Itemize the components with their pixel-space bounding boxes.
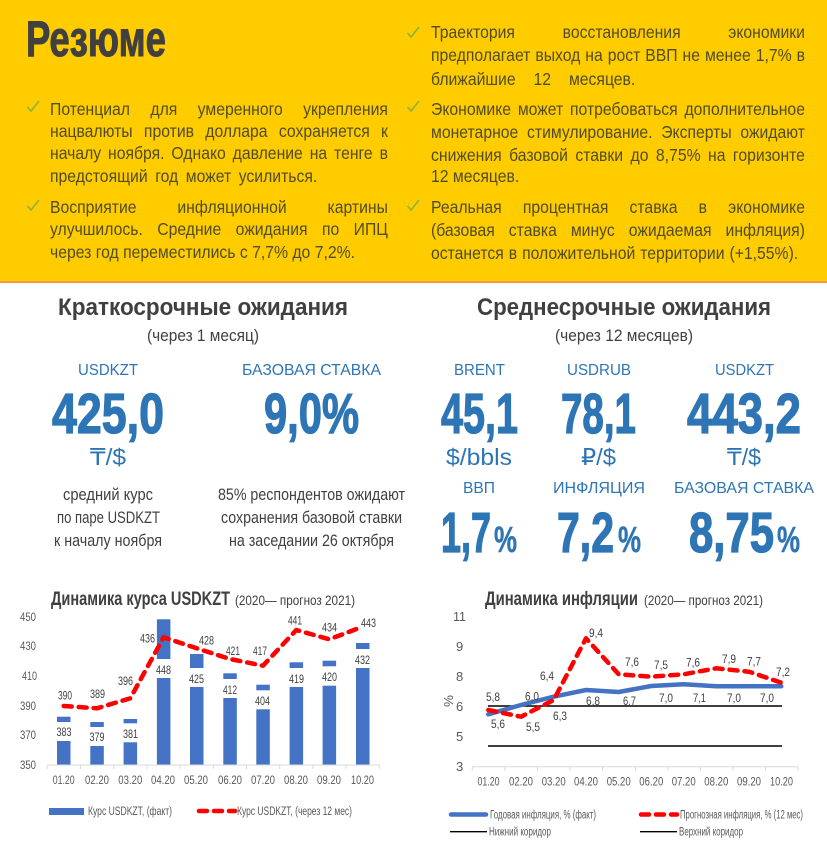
data labels: 7,2 bbox=[776, 665, 790, 679]
y axis labels: 370 bbox=[20, 730, 36, 742]
legend: Курс USDKZT, (через 12 мес) bbox=[237, 806, 352, 818]
metric: USDKZT twelve months bbox=[687, 362, 801, 470]
panel: summary: монетарное стимулирование. Эксперты ожидают bbox=[431, 122, 805, 142]
red forecast inflation line bbox=[488, 638, 781, 717]
y axis labels bbox=[20, 612, 37, 772]
chart title: USDKZT: (2020— прогноз 2021) bbox=[235, 592, 355, 608]
metric: Brent: BRENT bbox=[454, 362, 505, 379]
panel: summary: нацвалюты против доллара сохраняется к bbox=[50, 121, 388, 141]
legend bbox=[49, 806, 352, 818]
data labels: 7,6 bbox=[625, 655, 639, 669]
x axis labels: 08.20 bbox=[284, 775, 308, 787]
text: base rate note bbox=[218, 485, 405, 550]
panel: summary: (базовая ставка минус ожидаемая инфляция) bbox=[431, 220, 805, 240]
bullet: inflation perception bbox=[27, 197, 388, 262]
y axis labels: 410 bbox=[22, 671, 37, 683]
metric: USDKZT one month: USDKZT bbox=[78, 362, 138, 379]
bars bbox=[57, 619, 370, 765]
y axis labels: 3 bbox=[456, 759, 463, 774]
x axis labels bbox=[478, 776, 793, 788]
data labels: 7,0 bbox=[727, 691, 741, 705]
x axis labels: 02.20 bbox=[509, 776, 533, 788]
panel: summary: через год переместились с 7,7% до 7,2%. bbox=[50, 242, 355, 262]
x axis labels: 03.20 bbox=[118, 775, 142, 787]
line value labels bbox=[58, 614, 376, 702]
panel: summary: началу ноября. Однако давление на тенге в bbox=[50, 143, 388, 163]
y axis labels bbox=[441, 609, 466, 774]
bar value labels: 383 bbox=[56, 725, 72, 739]
chart title: inflation: Динамика инфляции bbox=[485, 589, 638, 610]
bar value labels: 420 bbox=[322, 670, 337, 684]
panel: summary bbox=[0, 0, 827, 283]
legend: Курс USDKZT, (факт) bbox=[88, 806, 172, 818]
legend: Годовая инфляция, % (факт) bbox=[490, 810, 596, 822]
metric: base rate twelve months: % bbox=[777, 519, 800, 560]
y axis labels: 450 bbox=[20, 612, 36, 624]
bar value labels bbox=[56, 653, 370, 744]
y axis labels: 5 bbox=[456, 729, 463, 744]
metric: inflation: % bbox=[618, 519, 641, 560]
metric: inflation: 7,2 bbox=[557, 501, 614, 565]
data labels: 7,5 bbox=[654, 658, 668, 672]
panel: summary: предполагает выход на рост ВВП не менее 1,7% в bbox=[431, 45, 805, 65]
line value labels: 441 bbox=[288, 614, 302, 628]
data labels: 5,5 bbox=[526, 720, 540, 734]
x axis labels: 05.20 bbox=[184, 775, 208, 787]
bar value labels: 381 bbox=[123, 727, 138, 741]
panel: summary: останется в положительной территории (+1,55%). bbox=[431, 243, 798, 263]
x axis labels: 09.20 bbox=[317, 775, 341, 787]
y axis labels: % bbox=[441, 695, 456, 707]
metric: base rate twelve months: 8,75 bbox=[689, 501, 774, 565]
metric: base rate one month: 9,0% bbox=[264, 382, 359, 446]
bullet: currency bbox=[27, 99, 388, 186]
data labels: 7,1 bbox=[693, 691, 706, 705]
data labels: 6,8 bbox=[586, 694, 600, 708]
x axis bbox=[47, 765, 379, 769]
data labels: 7,6 bbox=[686, 656, 700, 670]
x axis labels: 09.20 bbox=[737, 776, 761, 788]
blue actual inflation line bbox=[488, 684, 781, 714]
x axis labels: 02.20 bbox=[85, 775, 109, 787]
metric: inflation: ИНФЛЯЦИЯ bbox=[553, 480, 645, 497]
metric: GDP: 1,7 bbox=[441, 501, 491, 565]
bullet: monetary stimulus bbox=[407, 99, 805, 186]
legend: Верхний коридор bbox=[679, 826, 743, 838]
chart: USDKZT dynamics bbox=[20, 589, 379, 818]
text: base rate note: 85% респондентов ожидают bbox=[218, 485, 405, 504]
metric: base rate twelve months: БАЗОВАЯ СТАВКА bbox=[674, 480, 814, 497]
x axis labels: 10.20 bbox=[351, 775, 374, 787]
line value labels: 428 bbox=[199, 634, 214, 648]
text: USDKZT note: по паре USDKZT bbox=[57, 508, 160, 527]
line value labels: 421 bbox=[226, 644, 240, 658]
data labels: 7,7 bbox=[747, 654, 761, 668]
x axis labels: 01.20 bbox=[478, 776, 500, 788]
text: USDKZT note: к началу ноября bbox=[54, 531, 162, 550]
panel: summary: ближайшие 12 месяцев. bbox=[431, 69, 635, 89]
metric: USDKZT twelve months: 443,2 bbox=[687, 382, 801, 446]
metric: USDRUB: 78,1 bbox=[561, 382, 636, 446]
data labels: 6,7 bbox=[623, 694, 636, 708]
text: base rate note: сохранения базовой ставки bbox=[221, 508, 402, 527]
metric: Brent: 45,1 bbox=[441, 382, 518, 446]
title: Резюме bbox=[26, 11, 166, 67]
heading: short-term expectations: Краткосрочные ожидания bbox=[58, 294, 348, 321]
red forecast line bbox=[64, 627, 363, 708]
y axis labels: 350 bbox=[20, 760, 36, 772]
panel: summary: предстоящий год может усилиться. bbox=[50, 166, 317, 186]
panel: summary: улучшилось. Средние ожидания по ИПЦ bbox=[50, 219, 388, 239]
bar value labels: 425 bbox=[189, 672, 204, 686]
panel: summary: Потенциал для умеренного укрепления bbox=[50, 99, 388, 119]
metric: inflation bbox=[553, 480, 645, 565]
metric: USDRUB bbox=[561, 362, 636, 470]
y axis labels: 390 bbox=[20, 701, 36, 713]
metric: USDKZT one month: 425,0 bbox=[52, 382, 164, 446]
panel: summary: Экономике может потребоваться дополнительное bbox=[431, 99, 805, 119]
metric: USDRUB: USDRUB bbox=[567, 362, 631, 379]
data labels: 5,6 bbox=[491, 717, 505, 731]
heading: short-term expectations bbox=[58, 294, 348, 345]
x axis labels bbox=[53, 775, 374, 787]
bullet: real rate bbox=[407, 197, 805, 263]
data labels: 7,0 bbox=[760, 691, 774, 705]
y axis labels: 430 bbox=[20, 641, 36, 653]
line value labels: 390 bbox=[58, 688, 72, 702]
text: USDKZT note bbox=[54, 485, 162, 550]
data labels bbox=[486, 626, 790, 734]
heading: medium-term expectations bbox=[477, 294, 771, 345]
panel: summary: снижения базовой ставки до 8,75% на горизонте bbox=[431, 145, 805, 165]
x axis labels: 08.20 bbox=[704, 776, 728, 788]
line value labels: 443 bbox=[361, 616, 376, 630]
y axis labels: 6 bbox=[456, 699, 463, 714]
data labels: 9,4 bbox=[589, 626, 603, 640]
panel: summary: Траектория восстановления экономики bbox=[431, 22, 805, 42]
data labels: 6,4 bbox=[540, 669, 554, 683]
line value labels: 434 bbox=[322, 620, 337, 634]
data labels: 6,0 bbox=[525, 690, 539, 704]
panel: summary: Восприятие инфляционной картины bbox=[50, 197, 388, 217]
panel: summary: 12 месяцев. bbox=[431, 166, 519, 186]
metric: base rate one month bbox=[242, 362, 381, 446]
metric: USDRUB: ₽/$ bbox=[581, 444, 616, 470]
chart title: inflation: (2020— прогноз 2021) bbox=[644, 592, 763, 608]
legend: Нижний коридор bbox=[489, 826, 551, 838]
chart title: USDKZT: Динамика курса USDKZT bbox=[51, 589, 230, 610]
x axis labels: 05.20 bbox=[607, 776, 631, 788]
data labels: 6,3 bbox=[553, 709, 567, 723]
heading: short-term expectations: (через 1 месяц) bbox=[147, 326, 259, 345]
x axis labels: 06.20 bbox=[218, 775, 242, 787]
metric: base rate twelve months bbox=[674, 480, 814, 565]
metric: USDKZT twelve months: USDKZT bbox=[715, 362, 774, 379]
y axis labels: 11 bbox=[453, 609, 466, 624]
heading: medium-term expectations: Среднесрочные ожидания bbox=[477, 294, 771, 321]
heading: medium-term expectations: (через 12 месяцев) bbox=[555, 326, 693, 345]
data labels: 7,0 bbox=[659, 691, 673, 705]
line value labels: 417 bbox=[253, 644, 267, 658]
chart: inflation dynamics bbox=[441, 589, 803, 838]
x axis labels: 10.20 bbox=[770, 776, 793, 788]
metric: USDKZT one month bbox=[52, 362, 164, 470]
data labels: 5,8 bbox=[486, 690, 500, 704]
line value labels: 396 bbox=[118, 674, 133, 688]
metric: Brent: $/bbls bbox=[446, 444, 512, 470]
line value labels: 389 bbox=[90, 687, 105, 701]
line value labels: 436 bbox=[140, 632, 155, 646]
x axis labels: 07.20 bbox=[672, 776, 696, 788]
x axis labels: 04.20 bbox=[151, 775, 175, 787]
text: base rate note: на заседании 26 октября bbox=[229, 531, 394, 550]
bar value labels: 412 bbox=[223, 683, 237, 697]
corridor lines bbox=[488, 706, 782, 746]
metric: USDKZT one month: ₸/$ bbox=[90, 444, 126, 470]
metric: base rate one month: БАЗОВАЯ СТАВКА bbox=[242, 362, 381, 379]
bar value labels: 419 bbox=[289, 672, 304, 686]
panel: summary: Реальная процентная ставка в экономике bbox=[431, 197, 805, 217]
metric: Brent bbox=[441, 362, 518, 470]
x axis labels: 06.20 bbox=[639, 776, 663, 788]
x axis bbox=[472, 767, 798, 771]
y axis labels: 8 bbox=[456, 669, 463, 684]
text: USDKZT note: средний курс bbox=[63, 485, 153, 504]
bar value labels: 379 bbox=[90, 730, 105, 744]
metric: USDKZT twelve months: ₸/$ bbox=[727, 444, 761, 470]
x axis labels: 03.20 bbox=[542, 776, 566, 788]
data labels: 7,9 bbox=[722, 652, 736, 666]
legend bbox=[450, 810, 803, 838]
x axis labels: 07.20 bbox=[251, 775, 275, 787]
metric: GDP: % bbox=[494, 519, 517, 560]
bullet: GDP recovery bbox=[407, 22, 805, 89]
x axis labels: 04.20 bbox=[574, 776, 598, 788]
metric: GDP: ВВП bbox=[463, 480, 495, 497]
bar value labels: 432 bbox=[355, 653, 370, 667]
y axis labels: 9 bbox=[456, 639, 463, 654]
bar value labels: 404 bbox=[255, 694, 270, 708]
x axis labels: 01.20 bbox=[53, 775, 75, 787]
bar value labels: 448 bbox=[156, 663, 171, 677]
